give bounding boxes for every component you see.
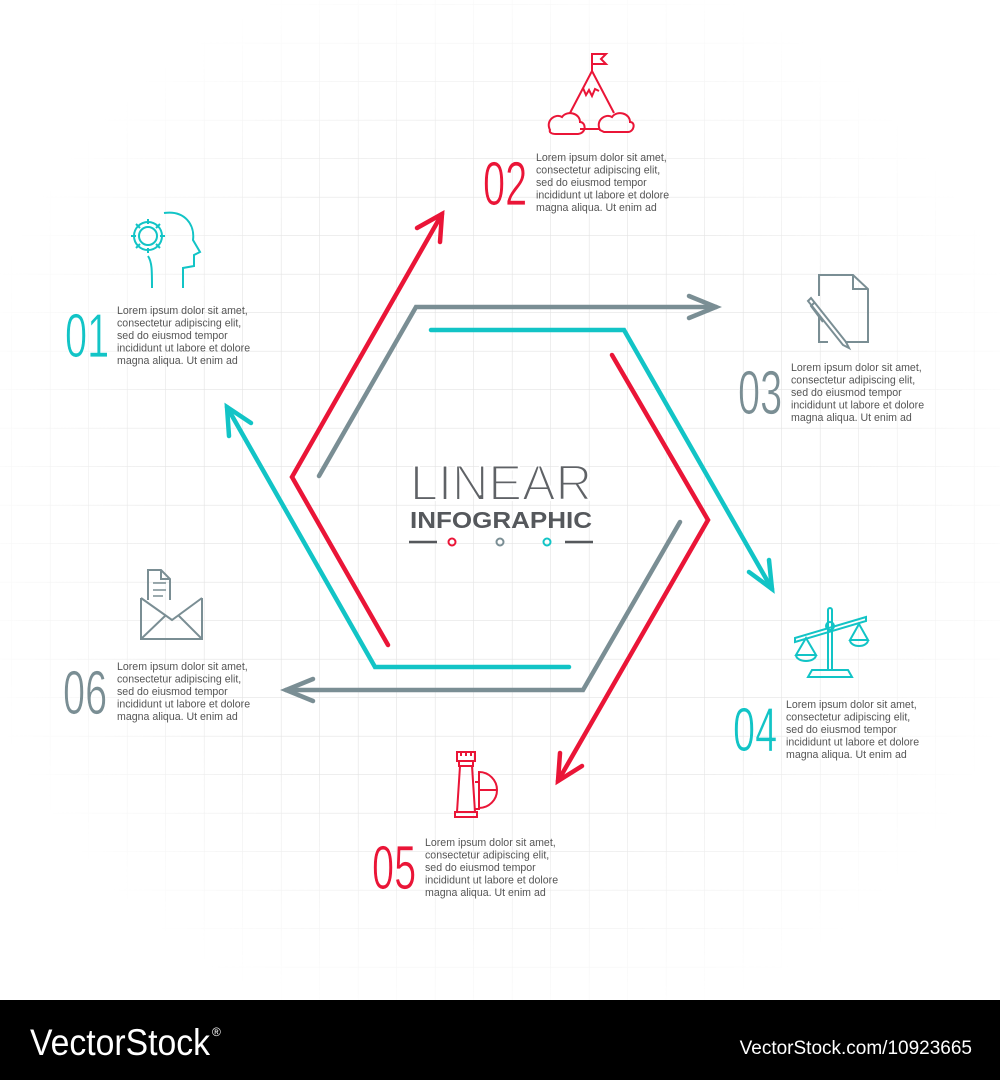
number 01: 01 [65, 302, 109, 371]
text 01: incididunt ut labore et dolore [117, 342, 250, 354]
step 02 [483, 54, 669, 219]
icon: head with gear [131, 213, 200, 288]
icon: chess rook and chart [455, 752, 497, 817]
step 05 [372, 752, 558, 903]
step 04 [733, 608, 919, 765]
icon: mountain flag [549, 54, 634, 134]
text 02: magna aliqua. Ut enim ad [536, 202, 657, 214]
step 03 [738, 275, 924, 428]
text 03: sed do eiusmod tempor [791, 387, 902, 399]
text 05: incididunt ut labore et dolore [425, 874, 558, 886]
text 03: Lorem ipsum dolor sit amet, [791, 362, 922, 374]
text 05: consectetur adipiscing elit, [425, 850, 549, 862]
hexagon arrows [227, 214, 772, 781]
arrow: gray top [319, 296, 716, 476]
number 06: 06 [63, 659, 107, 728]
text 06: incididunt ut labore et dolore [117, 698, 250, 710]
text 06: magna aliqua. Ut enim ad [117, 711, 238, 723]
number 02: 02 [483, 150, 527, 219]
text 06: sed do eiusmod tempor [117, 686, 228, 698]
footer bar: ® [212, 1025, 221, 1039]
text 04: sed do eiusmod tempor [786, 724, 897, 736]
text 05: sed do eiusmod tempor [425, 862, 536, 874]
center title [409, 455, 593, 546]
text 03: consectetur adipiscing elit, [791, 374, 915, 386]
step 01 [65, 213, 250, 371]
text 06: consectetur adipiscing elit, [117, 674, 241, 686]
text 05: magna aliqua. Ut enim ad [425, 887, 546, 899]
center title: LINEAR [410, 455, 592, 511]
footer bar [0, 1000, 1000, 1080]
arrow: cyan bottom left [227, 407, 569, 667]
icon: document with pen [808, 275, 868, 348]
arrow: cyan top right [431, 330, 772, 589]
text 03: magna aliqua. Ut enim ad [791, 412, 912, 424]
number 03: 03 [738, 359, 782, 428]
center title: INFOGRAPHIC [410, 507, 592, 533]
text 04: consectetur adipiscing elit, [786, 712, 910, 724]
arrow: red right [558, 355, 708, 781]
text 01: sed do eiusmod tempor [117, 330, 228, 342]
text 02: incididunt ut labore et dolore [536, 190, 669, 202]
text 04: Lorem ipsum dolor sit amet, [786, 699, 917, 711]
footer bar: VectorStock.com/10923665 [740, 1038, 972, 1059]
footer bar: VectorStock [30, 1022, 210, 1063]
icon: envelope with letter [141, 570, 202, 639]
icon: scales [795, 608, 868, 677]
text 04: incididunt ut labore et dolore [786, 736, 919, 748]
text 01: consectetur adipiscing elit, [117, 318, 241, 330]
step 06 [63, 570, 250, 728]
text 02: sed do eiusmod tempor [536, 177, 647, 189]
arrow: gray bottom [286, 522, 680, 701]
number 05: 05 [372, 834, 416, 903]
text 05: Lorem ipsum dolor sit amet, [425, 837, 556, 849]
text 02: Lorem ipsum dolor sit amet, [536, 152, 667, 164]
text 06: Lorem ipsum dolor sit amet, [117, 661, 248, 673]
arrow: red left [292, 214, 442, 645]
text 01: Lorem ipsum dolor sit amet, [117, 305, 248, 317]
text 03: incididunt ut labore et dolore [791, 400, 924, 412]
text 04: magna aliqua. Ut enim ad [786, 749, 907, 761]
text 01: magna aliqua. Ut enim ad [117, 355, 238, 367]
text 02: consectetur adipiscing elit, [536, 164, 660, 176]
number 04: 04 [733, 696, 777, 765]
